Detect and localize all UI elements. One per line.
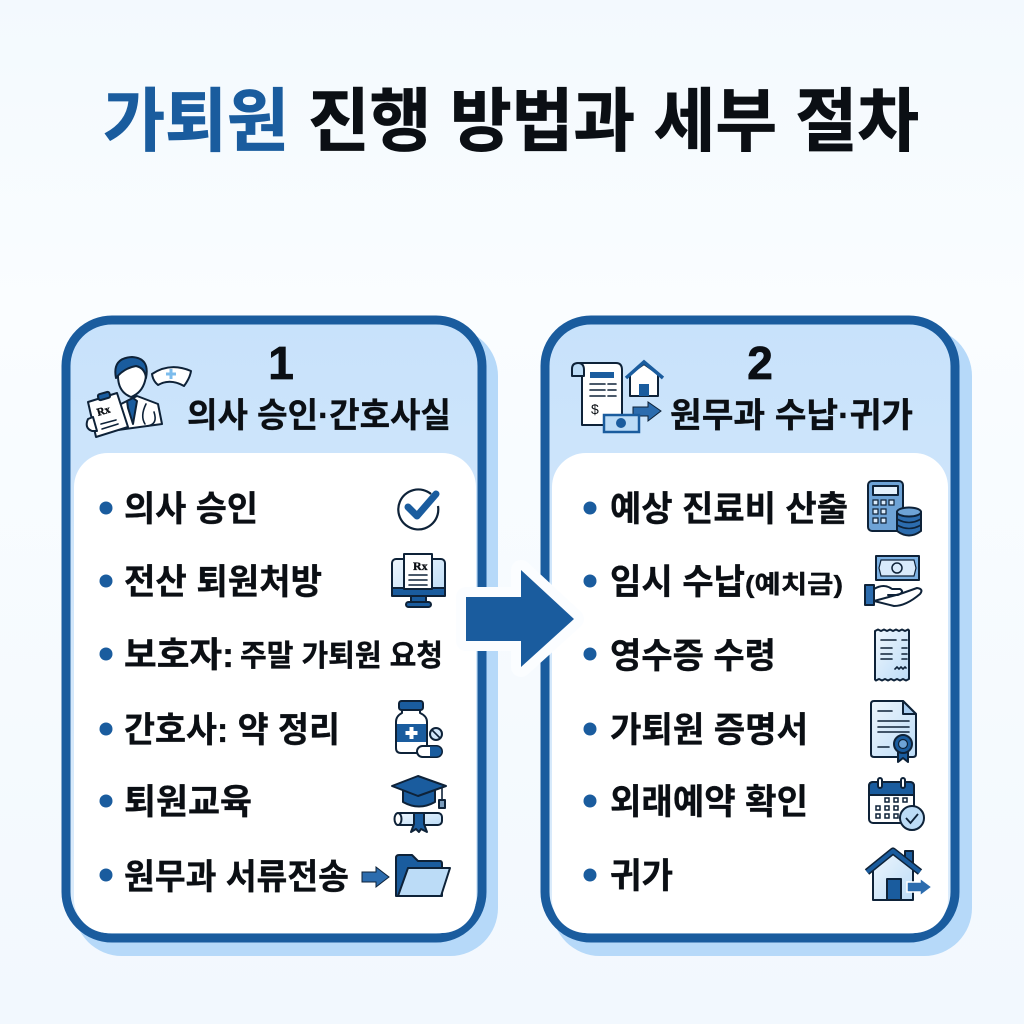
- icon: receipt: [875, 630, 909, 680]
- list item: 외래예약 확인: 외래예약 확인: [610, 783, 808, 822]
- panel 2: 원무과 수납·귀가: [545, 320, 972, 956]
- list item: 간호사 약 정리: 간호사: 약 정리: [124, 711, 340, 750]
- icon: bill, house and money: $: [591, 401, 599, 417]
- title: 진행 방법과 세부 절차: [308, 83, 919, 160]
- list item: 의사 승인: 의사 승인: [124, 490, 258, 529]
- icon: doctor and nurse cap: [87, 357, 191, 437]
- list item: 임시 수납 예치금: (예치금): [745, 571, 843, 599]
- panel 1 heading: 의사 승인·간호사실: [187, 397, 451, 435]
- list item: 퇴원교육: 퇴원교육: [124, 783, 252, 822]
- title: 가퇴원: [103, 83, 289, 160]
- panel 1: 의사 승인·간호사실: [66, 320, 498, 956]
- icon: calendar with check: [869, 778, 924, 830]
- icon: money over hand: [865, 556, 921, 606]
- list item: 영수증 수령: 영수증 수령: [610, 637, 776, 676]
- list item: 전산 퇴원처방: 전산 퇴원처방: [124, 563, 322, 602]
- icon: doctor and nurse cap: Rx: [96, 404, 112, 419]
- arrow between panels: [466, 570, 574, 667]
- icon: monitor prescription: Rx: [413, 559, 428, 573]
- icon: certificate: [871, 701, 916, 762]
- icon: arrow into folder: [362, 855, 450, 896]
- icon: monitor prescription: [392, 554, 445, 607]
- list item: 원무과 서류전송: 원무과 서류전송: [124, 858, 349, 897]
- icon: house with arrow: [867, 851, 932, 900]
- step number 1: 1: [268, 337, 294, 389]
- icon: bill, house and money: [572, 362, 663, 432]
- icon: graduation cap and diploma: [392, 776, 446, 832]
- icon: calculator and coins: [868, 481, 921, 536]
- step number 2: 2: [747, 337, 773, 389]
- list item: 보호자 주말 가퇴원 요청: [100, 636, 443, 675]
- list item: 예상 진료비 산출: 예상 진료비 산출: [610, 490, 848, 529]
- icon: medicine bottle and pills: [396, 701, 442, 757]
- panel 2 heading: 원무과 수납·귀가: [670, 397, 913, 435]
- list item: 임시 수납 예치금: 임시 수납: [610, 563, 745, 602]
- list item: 보호자 주말 가퇴원 요청: 주말 가퇴원 요청: [240, 640, 443, 673]
- list item: 보호자 주말 가퇴원 요청: 보호자:: [124, 636, 234, 675]
- list item: 귀가: 귀가: [610, 857, 673, 896]
- list item: 가퇴원 증명서: 가퇴원 증명서: [610, 711, 808, 750]
- list item: 임시 수납 예치금: [584, 563, 843, 602]
- list item: 귀가: [584, 857, 673, 896]
- icon: check circle: [398, 489, 438, 529]
